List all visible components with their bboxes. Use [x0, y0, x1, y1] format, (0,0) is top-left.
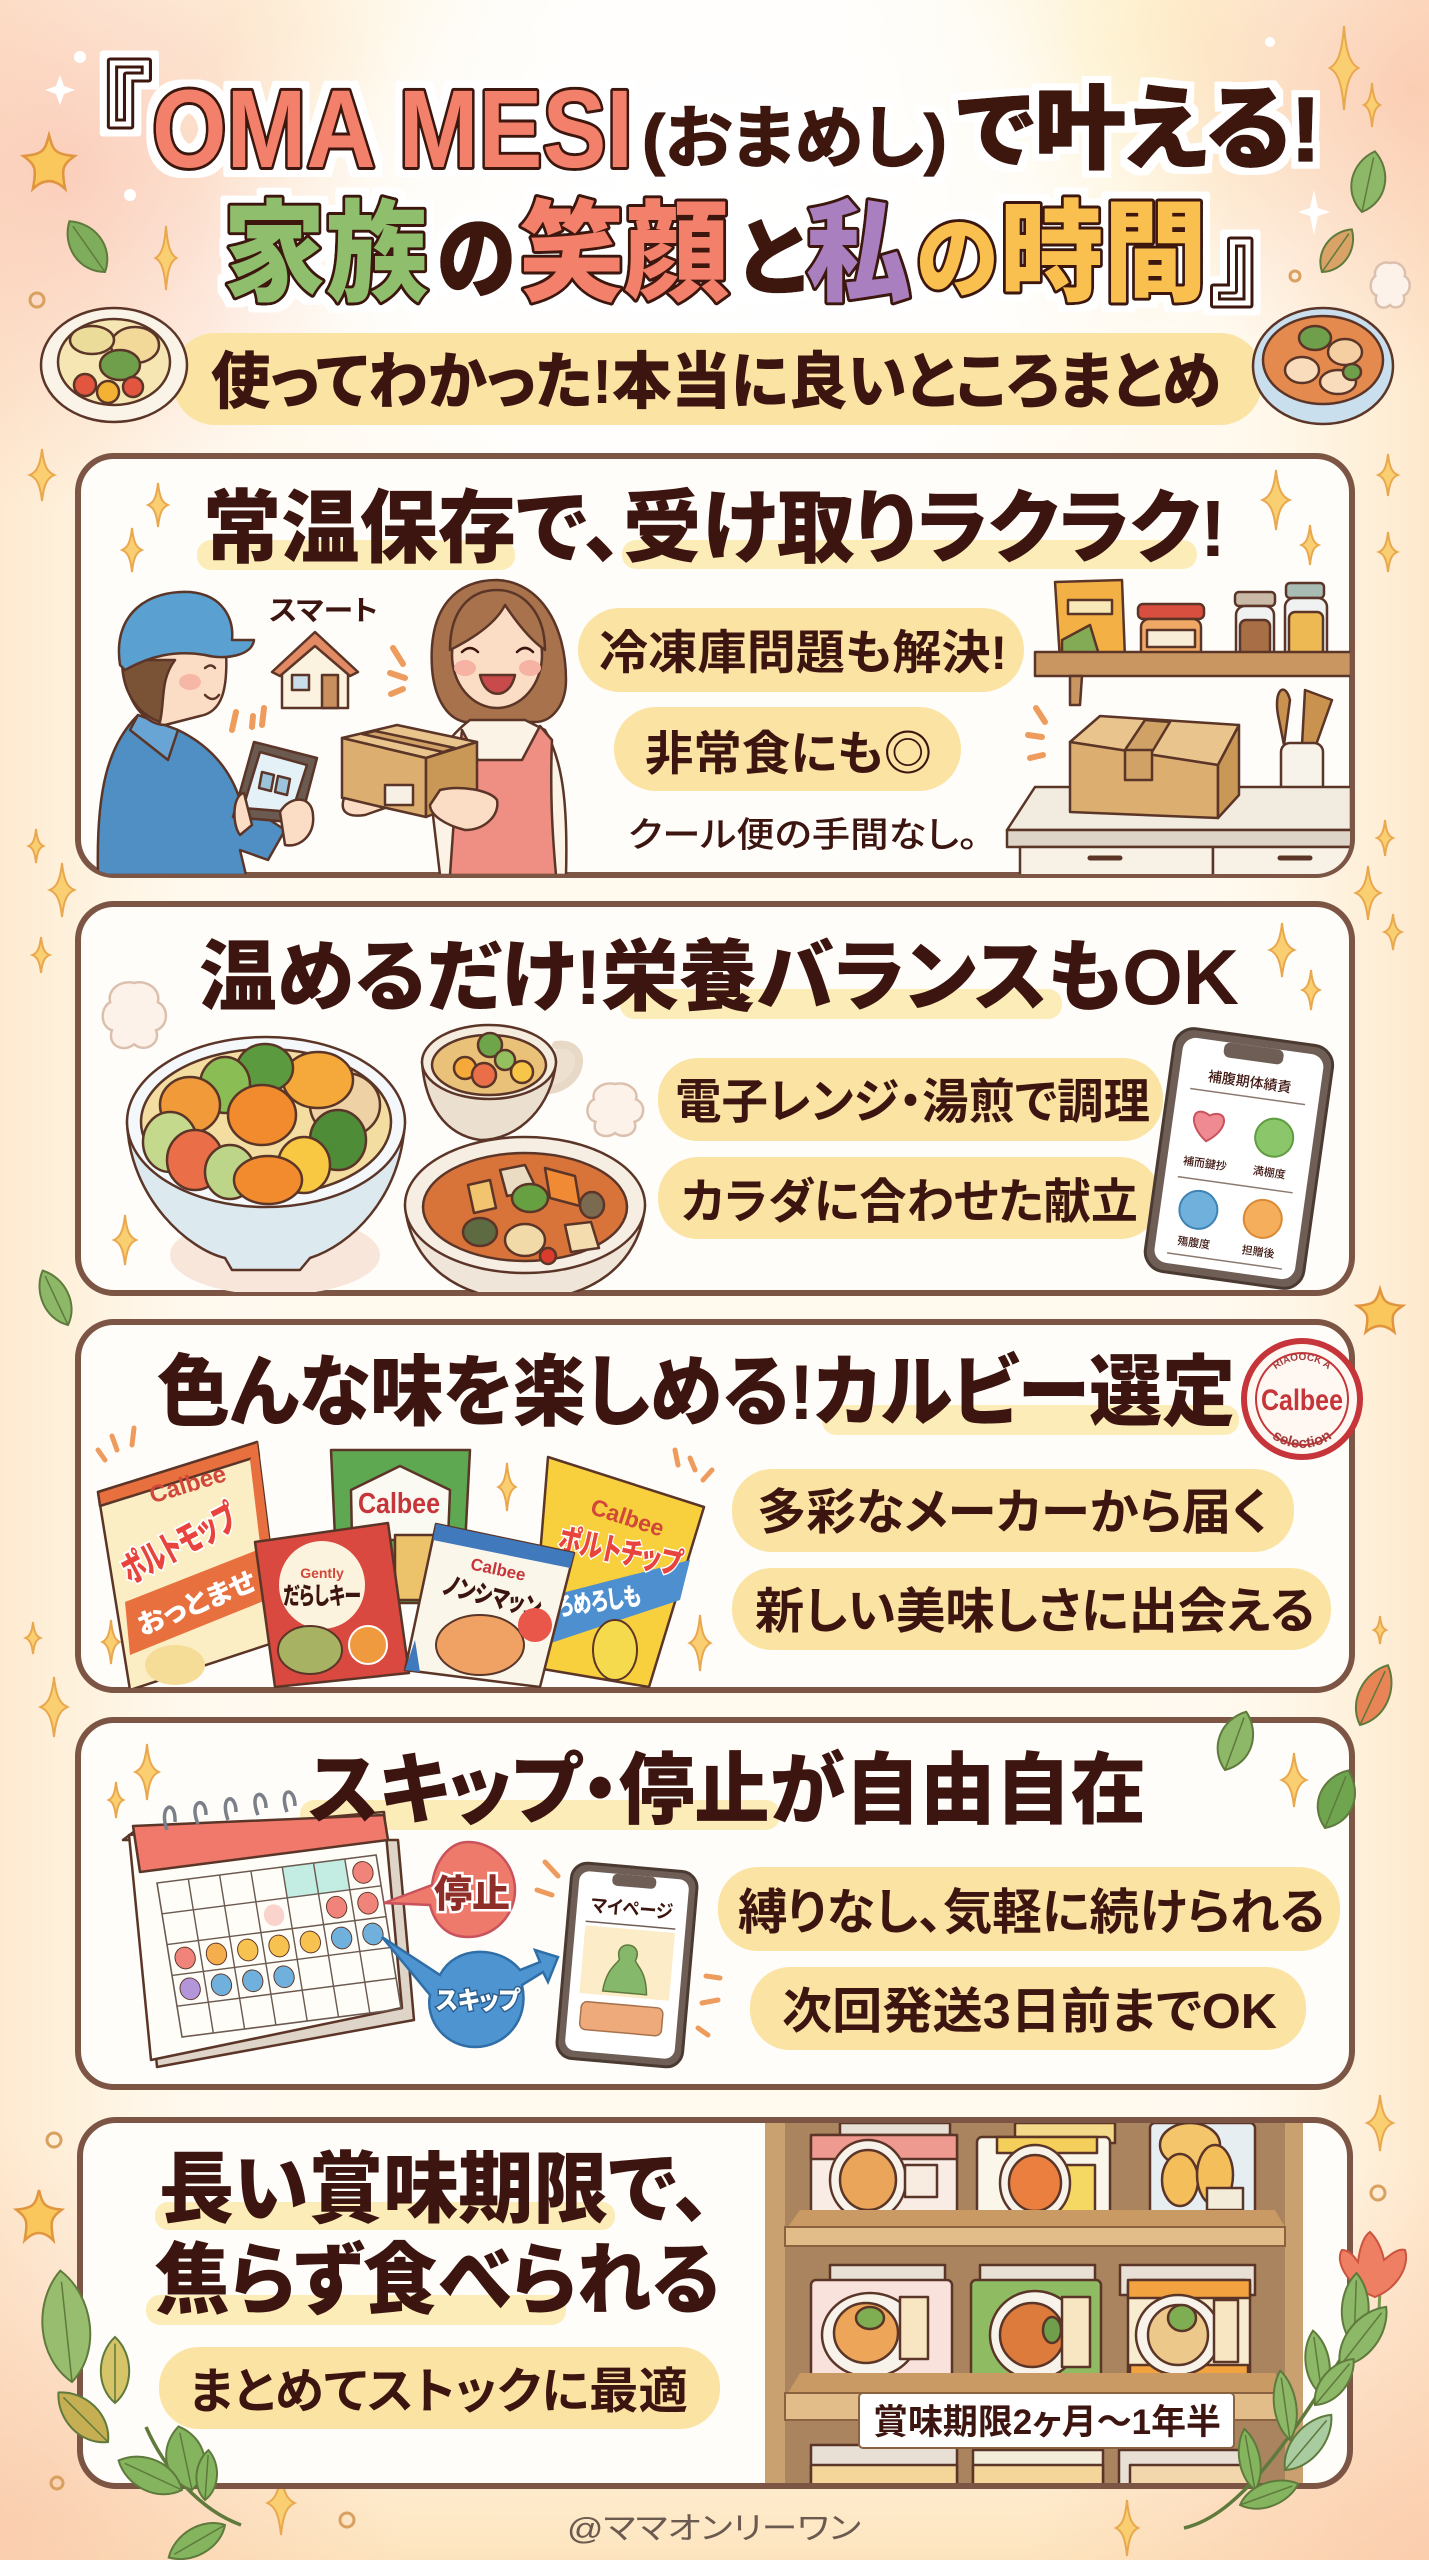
shelf 2 — [788, 2373, 1285, 2393]
accents — [537, 1862, 720, 2035]
note text: クール便の手間なし。 — [628, 816, 978, 855]
panel: Calbee selection variety — [75, 1319, 1363, 1693]
flower and leaves: bottom right cluster — [1184, 2232, 1406, 2528]
icon: house with label: スマート — [269, 595, 378, 626]
illustration: snack bags — [98, 1442, 704, 1690]
yellow bag — [530, 1457, 704, 1687]
illustration: smartphone nutrition app: 満棚度 — [1252, 1163, 1287, 1182]
panel border — [80, 2120, 1350, 2486]
top row meal packs — [810, 2123, 1256, 2210]
title: OMA MESI — [152, 68, 633, 191]
blue bag: Calbee — [469, 1555, 527, 1585]
blue bag: ノンシマッン — [440, 1572, 544, 1623]
title — [98, 56, 1321, 318]
illustration: calendar — [123, 1792, 414, 2067]
panel: heat and eat, balanced nutrition — [78, 904, 1352, 1300]
heading: 色んな味を楽しめる!カルビー選定 — [157, 1348, 1235, 1436]
blue bag — [405, 1524, 574, 1687]
callout pills: 冷凍庫問題も解決 ! — [599, 626, 1007, 679]
illustration: soup cup — [422, 1025, 579, 1140]
sparkles and leaves — [109, 1706, 1364, 1834]
orange bag — [98, 1442, 282, 1690]
title: の — [437, 210, 515, 310]
illustration: pantry shelves with meal packs — [765, 2123, 1303, 2495]
callout pills — [718, 1867, 1340, 2050]
heading highlight — [620, 989, 1062, 1019]
stamp: Calbee selection: RIAOOCK A — [1272, 1353, 1330, 1370]
heading: 温めるだけ!栄養バランスもOK — [199, 933, 1239, 1021]
callout: skip with arrow — [382, 1937, 558, 2047]
icon: house with label — [269, 595, 378, 708]
shelf 1 — [788, 2210, 1285, 2227]
illustration: smartphone nutrition app: 担贈後 — [1241, 1242, 1275, 1261]
yellow bag: ポルトチップ — [555, 1522, 686, 1582]
heading: 長い賞味期限で、 — [159, 2145, 711, 2233]
heading highlight — [197, 540, 1197, 570]
green bag — [331, 1450, 470, 1603]
stamp: Calbee selection: Calbee — [1261, 1384, 1343, 1417]
accents — [98, 1428, 712, 1480]
icon: soup bowl — [1253, 308, 1393, 424]
bottom row meal packs — [810, 2444, 1247, 2483]
callout pills: 新しい美味しさに出会える — [755, 1585, 1315, 1639]
orange bag: ポルトモップ — [114, 1496, 245, 1591]
footer credit: @ママオンリーワン — [567, 2511, 861, 2546]
title: 『 — [98, 56, 150, 168]
heading highlight — [146, 2202, 615, 2325]
heading highlight — [822, 1405, 1239, 1435]
orange bag: おっとませ — [133, 1566, 260, 1641]
accent dashes — [232, 648, 1045, 758]
middle row meal packs — [811, 2265, 1255, 2385]
panel: skip or pause freely — [78, 1706, 1364, 2087]
illustration: phone my page: マイページ — [590, 1896, 674, 1924]
title: の — [916, 210, 998, 310]
sparkles — [102, 1463, 711, 1671]
title: 叶える! — [1034, 79, 1321, 181]
title: と — [738, 212, 806, 306]
callout: skip with arrow: スキップ — [436, 1987, 521, 2015]
title: 私 — [806, 193, 911, 316]
title: 時間 — [1000, 193, 1207, 316]
callout pills: 縛りなし、気軽に続けられる — [738, 1886, 1325, 1940]
callout pills: 非常食にも◎ — [645, 727, 932, 780]
illustration: vegetable soup bowl — [405, 1137, 645, 1300]
orange bag: Calbee — [146, 1460, 229, 1509]
title: 』 — [1212, 206, 1262, 318]
steam — [103, 982, 643, 1136]
heading highlight — [300, 1800, 780, 1830]
sparkles — [122, 470, 1319, 572]
callout: stop: 停止 — [434, 1874, 510, 1916]
panel: long shelf life — [80, 2120, 1350, 2495]
illustration: smartphone nutrition app: 補腹期体績責 — [1207, 1068, 1292, 1096]
illustration: delivery man with tablet — [98, 592, 317, 875]
callout pills: 次回発送3日前までOK — [782, 1985, 1277, 2039]
sparkles — [114, 923, 1320, 1265]
title: (おまめし) — [642, 101, 947, 177]
illustration: smiling woman holding box — [342, 580, 566, 875]
callout pill — [159, 2347, 720, 2429]
title: 家族 — [223, 193, 428, 316]
icon: salad plate — [41, 308, 187, 422]
expiry label: 賞味期限2ヶ月〜1年半 — [873, 2403, 1221, 2442]
heading: 焦らず食べられる — [155, 2236, 720, 2324]
callout pills — [732, 1469, 1331, 1650]
callout pills: 多彩なメーカーから届く — [757, 1486, 1268, 1540]
yellow bag: Calbee — [588, 1493, 667, 1541]
yellow bag: ろめろしも — [555, 1582, 643, 1622]
subtitle pill: 使ってわかった!本当に良いところまとめ — [211, 348, 1221, 417]
heading: スキップ・停止が自由自在 — [308, 1746, 1146, 1834]
green bag: Calbee — [358, 1488, 440, 1520]
red bag: だらしキー — [283, 1583, 361, 1610]
callout pills — [658, 1058, 1163, 1239]
illustration: pantry shelf and counter — [1007, 580, 1353, 877]
title: で — [957, 84, 1034, 178]
heading — [155, 2145, 720, 2324]
illustration: smartphone nutrition app — [1143, 1026, 1335, 1291]
expiry label — [859, 2393, 1234, 2448]
illustration: smartphone nutrition app: 補而鍵抄 — [1182, 1153, 1228, 1173]
callout pills: カラダに合わせた献立 — [681, 1176, 1138, 1229]
illustration: smartphone nutrition app: 殤腹度 — [1176, 1233, 1211, 1252]
callout pills — [578, 608, 1024, 791]
leaves: bottom left cluster — [37, 2268, 241, 2560]
heading: 常温保存で、受け取りラクラク! — [203, 484, 1226, 573]
panel: room temperature storage — [78, 456, 1353, 877]
illustration: phone my page — [556, 1862, 698, 2068]
callout pills: 電子レンジ・湯煎で調理 — [675, 1076, 1150, 1129]
callout pill: まとめてストックに最適 — [189, 2365, 688, 2419]
illustration: vegetable bowl — [127, 1037, 405, 1295]
title: 笑顔 — [519, 193, 729, 316]
red bag — [255, 1523, 409, 1687]
callout: stop — [384, 1842, 515, 1937]
red bag: Gently — [300, 1565, 344, 1581]
stamp: Calbee selection — [1241, 1338, 1363, 1460]
stamp: Calbee selection: selection — [1273, 1432, 1332, 1448]
